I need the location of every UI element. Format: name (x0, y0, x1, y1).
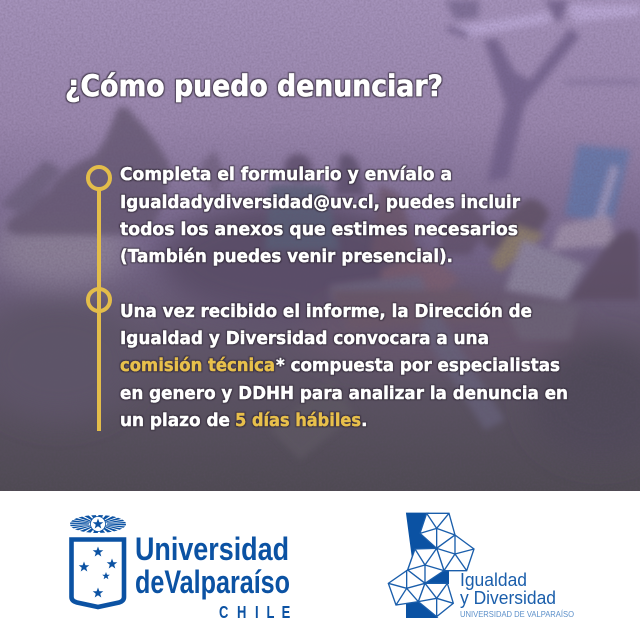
person right of left (284, 154, 312, 182)
step 2 text: un plazo de (120, 411, 230, 431)
logo: Universidad de Valparaíso (72, 516, 290, 623)
step 2 text: 5 días hábiles (235, 411, 361, 431)
step 2 text: . (361, 411, 368, 431)
wordmark: UNIVERSIDAD DE VALPARAÍSO (460, 610, 574, 619)
tree (484, 28, 580, 182)
wordmark: Universidad (135, 531, 289, 567)
person left (7, 107, 170, 235)
wordmark: Igualdad (460, 570, 527, 590)
title: ¿Cómo puedo denunciar? (65, 69, 443, 103)
blue window (565, 145, 630, 225)
step 2 text: comisión técnica (120, 356, 275, 376)
step 2 text: en genero y DDHH para analizar la denuncia en (120, 384, 568, 404)
icon: radiant star crest (80, 516, 116, 532)
step 2 text: Igualdad y Diversidad convocara a una (120, 329, 489, 349)
logo: Igualdad y Diversidad (388, 513, 574, 619)
step 1 text: todos los anexos que estimes necesarios (120, 220, 518, 240)
people and table right (480, 199, 550, 250)
timeline (88, 167, 110, 431)
step 2 text: * compuesta por especialistas (276, 356, 560, 376)
step 1 text (120, 165, 520, 267)
icon: polygon network (388, 513, 474, 617)
step 1 text: Igualdadydiversidad@uv.cl, puedes incluir (120, 193, 520, 213)
background photo with purple overlay (0, 0, 640, 491)
wordmark: CHILE (219, 603, 290, 623)
lower patches (332, 290, 435, 302)
icon: shield with stars (72, 540, 124, 607)
step 2 text: Una vez recibido el informe, la Dirección de (120, 302, 532, 322)
wordmark (460, 570, 574, 619)
step 1 text: (También puedes venir presencial). (120, 247, 453, 267)
wordmark: y Diversidad (460, 588, 556, 608)
wordmark (135, 531, 290, 623)
white footer band (0, 491, 640, 640)
step 1 text: Completa el formulario y envíalo a (120, 165, 452, 185)
step 2 text (120, 302, 568, 431)
wordmark: deValparaíso (135, 564, 290, 600)
